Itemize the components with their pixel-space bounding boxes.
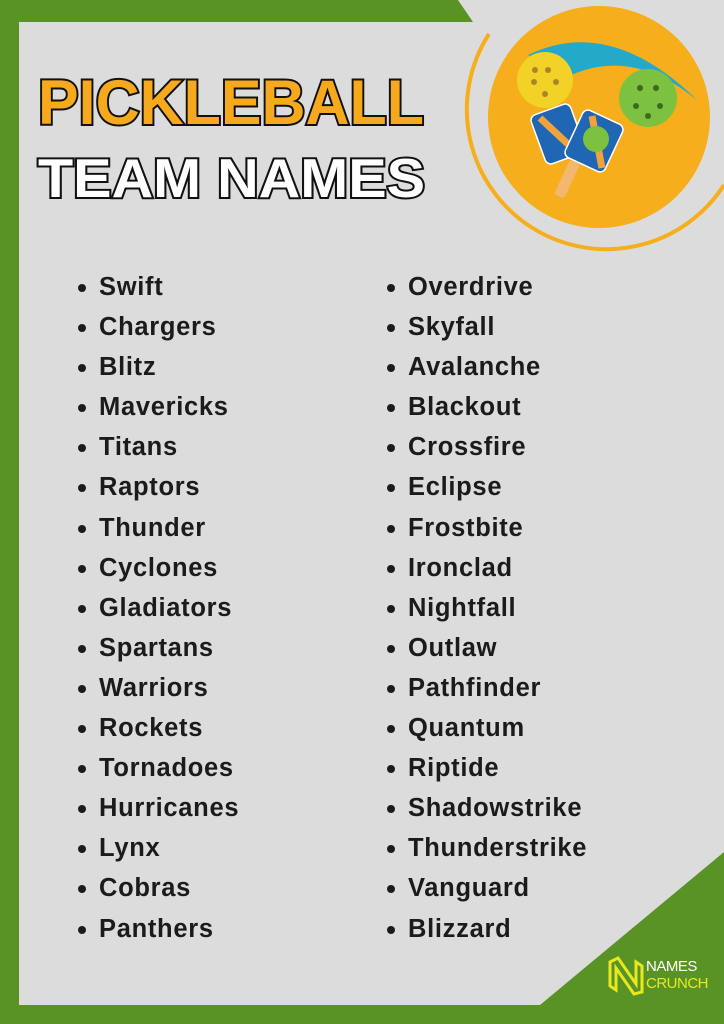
list: right column: Skyfall [408,313,495,341]
list: right column: Riptide [408,754,499,782]
list: right column: Pathfinder [408,674,541,702]
list: right column [387,273,587,942]
logo: names crunch: NAMES [646,958,697,975]
list: left column: Tornadoes [99,754,234,782]
list: right column: Overdrive [408,273,533,301]
list: right column: Nightfall [408,594,516,622]
list: right column: Quantum [408,714,525,742]
list: right column: Thunderstrike [408,834,587,862]
title: TEAM NAMES [38,147,425,209]
list: left column: Swift [99,273,163,301]
list: right column: Vanguard [408,874,530,902]
list: left column: Mavericks [99,393,229,421]
list: right column: Ironclad [408,554,513,582]
list: left column: Panthers [99,914,214,942]
list: right column: Blackout [408,393,521,421]
list: left column: Hurricanes [99,794,239,822]
list: right column: Frostbite [408,514,523,542]
list: left column: Thunder [99,514,206,542]
list: left column: Chargers [99,313,217,341]
list: right column: Avalanche [408,353,541,381]
title [36,68,425,209]
logo: names crunch: CRUNCH [646,975,708,992]
list: right column: Outlaw [408,634,497,662]
list: left column [78,273,239,942]
icon: pickleball circle [464,6,724,252]
list: right column: Shadowstrike [408,794,582,822]
list: right column: Eclipse [408,473,502,501]
list: left column: Gladiators [99,594,232,622]
list: left column: Blitz [99,353,156,381]
list: left column: Cyclones [99,554,218,582]
title: PICKLEBALL [38,68,424,138]
list: right column: Crossfire [408,433,526,461]
logo: names crunch [608,956,708,996]
list: left column: Raptors [99,473,200,501]
list: left column: Warriors [99,674,209,702]
list: left column: Lynx [99,834,160,862]
list: left column: Cobras [99,874,191,902]
list: left column: Titans [99,433,178,461]
list: right column: Blizzard [408,914,511,942]
list: left column: Rockets [99,714,203,742]
list: left column: Spartans [99,634,214,662]
